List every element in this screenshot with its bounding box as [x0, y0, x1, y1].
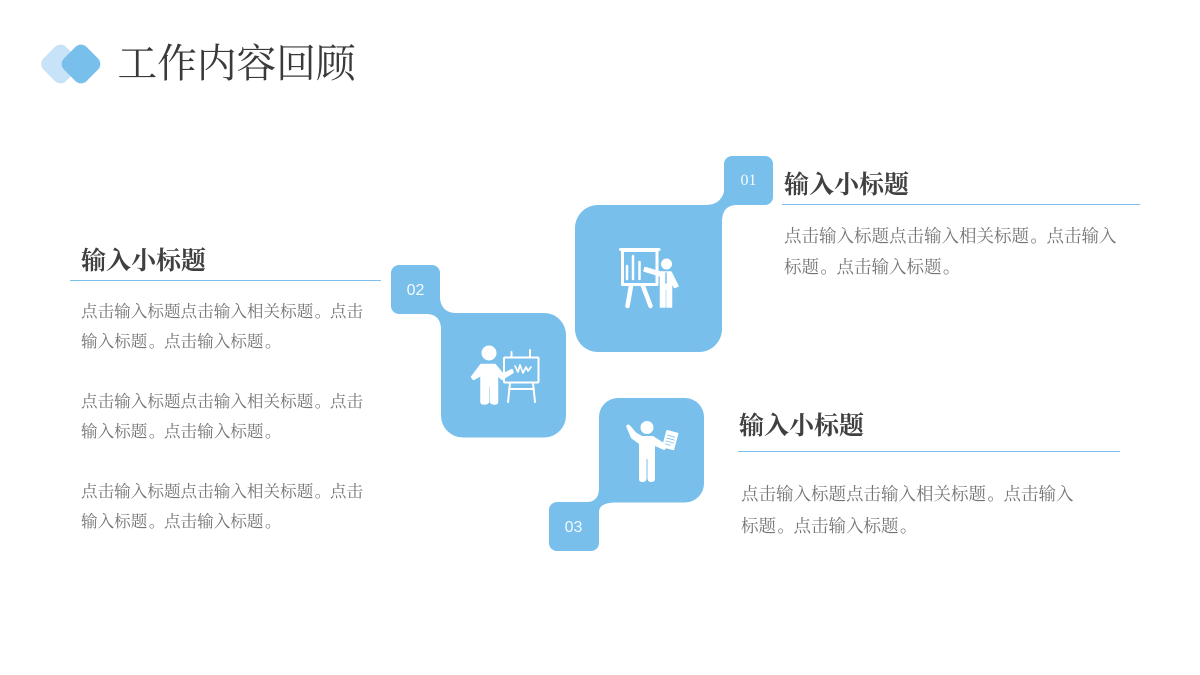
- panel: section 02 text: [70, 247, 381, 531]
- block 02: [391, 265, 566, 438]
- block 03: [549, 398, 704, 551]
- text block 01: 点击输入标题点击输入相关标题。点击输入: [784, 226, 1116, 246]
- text block 02c: [81, 482, 363, 531]
- heading 03: 输入小标题: [739, 413, 864, 440]
- block 01: [575, 156, 773, 352]
- heading 02: 输入小标题: [81, 248, 206, 275]
- text block 01: 标题。点击输入标题。: [784, 257, 960, 277]
- block 03: 03: [565, 519, 582, 536]
- text block 02a: 输入标题。点击输入标题。: [81, 332, 281, 351]
- icon: presenter with line chart easel: [472, 346, 538, 404]
- text block 02b: 点击输入标题点击输入相关标题。点击: [81, 392, 363, 411]
- heading 01: 输入小标题: [784, 172, 909, 199]
- panel: section 01 text: [782, 171, 1140, 277]
- text block 03: [741, 484, 1074, 536]
- title: 工作内容回顾: [118, 42, 356, 86]
- text block 02c: 点击输入标题点击输入相关标题。点击: [81, 482, 363, 501]
- text block 01: [784, 226, 1116, 277]
- icon: person holding clipboard: [626, 421, 679, 482]
- panel: section 03 text: [738, 412, 1120, 536]
- block 01: 01: [740, 172, 756, 189]
- icon: presenter with chart board: [620, 250, 678, 307]
- text block 02b: 输入标题。点击输入标题。: [81, 422, 281, 441]
- text block 03: 点击输入标题点击输入相关标题。点击输入: [741, 484, 1074, 504]
- text block 02a: [81, 302, 363, 351]
- text block 02b: [81, 392, 363, 441]
- block 02: 02: [407, 282, 424, 299]
- logo: overlapping diamonds: [41, 44, 100, 84]
- text block 03: 标题。点击输入标题。: [741, 516, 917, 536]
- text block 02c: 输入标题。点击输入标题。: [81, 512, 281, 531]
- text block 02a: 点击输入标题点击输入相关标题。点击: [81, 302, 363, 321]
